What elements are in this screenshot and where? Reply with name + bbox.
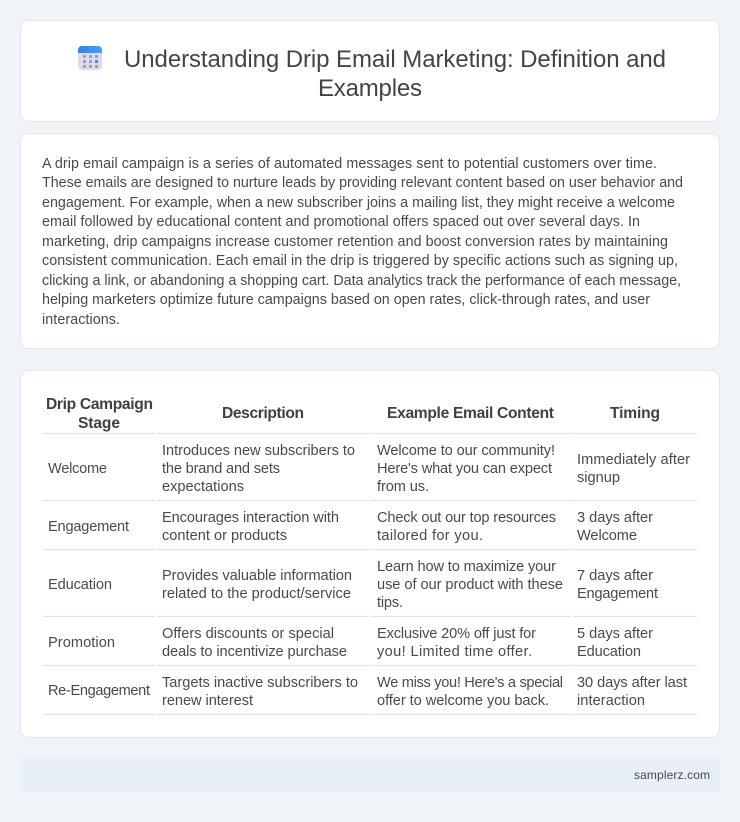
panel: intro paragraph: interactions. <box>42 312 120 328</box>
row: Promotion <box>48 626 653 660</box>
panel: intro paragraph: clicking a link, or abandoning a shopping cart. Data analytics track the performance of each message, <box>42 273 681 289</box>
row: Engagement: 3 days after <box>577 510 653 526</box>
row: Re-Engagement: renew interest <box>162 693 253 709</box>
row: Welcome: Here's what you can expect <box>377 461 552 477</box>
footer: samplerz.com <box>634 768 710 782</box>
row: Welcome: Immediately after <box>577 452 690 468</box>
row: Promotion: Exclusive 20% off just for <box>377 626 536 642</box>
row: Re-Engagement: interaction <box>577 693 645 709</box>
row: Re-Engagement: Re-Engagement <box>48 683 150 699</box>
row: Welcome: Introduces new subscribers to <box>162 443 355 459</box>
row: Promotion: Promotion <box>48 635 115 651</box>
row: Education: Education <box>48 577 112 593</box>
row: Welcome: expectations <box>162 479 244 495</box>
row: Promotion: you! Limited time offer. <box>377 644 532 660</box>
table header: Drip Campaign <box>46 396 153 413</box>
row: Promotion: 5 days after <box>577 626 653 642</box>
icon: calendar <box>78 46 102 70</box>
row: Welcome: the brand and sets <box>162 461 280 477</box>
row: Engagement <box>48 510 653 544</box>
row: Welcome: signup <box>577 470 620 486</box>
panel: intro paragraph: email followed by educational content and promotional offers spaced out over several days. In <box>42 214 640 230</box>
panel: intro paragraph: engagement. For example, when a new subscriber joins a mailing list, they might receive a welcome <box>42 195 675 211</box>
title text: Examples <box>318 75 422 102</box>
panel: intro paragraph <box>20 134 720 348</box>
row: Welcome <box>48 443 690 495</box>
row: Education: 7 days after <box>577 568 653 584</box>
panel: intro paragraph: helping marketers optimize future campaigns based on open rates, click-through rates, and user <box>42 292 650 308</box>
row: Re-Engagement: Targets inactive subscribers to <box>162 675 358 691</box>
row: Engagement: Check out our top resources <box>377 510 556 526</box>
panel: title <box>20 20 720 122</box>
row: Promotion: deals to incentivize purchase <box>162 644 347 660</box>
panel: drip campaign table <box>20 370 720 738</box>
row: Engagement: Welcome <box>577 528 637 544</box>
row: Welcome: Welcome to our community! <box>377 443 555 459</box>
row: Education: Engagement <box>577 586 658 602</box>
row: Re-Engagement <box>48 675 687 709</box>
table header <box>46 396 660 432</box>
row: Education: Provides valuable information <box>162 568 352 584</box>
panel: intro paragraph: consistent communication. Each email in the drip is triggered by specific actions such as signing up, <box>42 253 678 269</box>
table header: Stage <box>78 415 120 432</box>
panel: intro paragraph: marketing, drip campaigns increase customer retention and boost conversion rates by maintaining <box>42 234 668 250</box>
row: Education: Learn how to maximize your <box>377 559 556 575</box>
table header: Timing <box>610 405 660 422</box>
row: Engagement: Encourages interaction with <box>162 510 339 526</box>
row: Welcome: from us. <box>377 479 429 495</box>
title text: Understanding Drip Email Marketing: Definition and <box>124 46 666 73</box>
row: Promotion: Offers discounts or special <box>162 626 334 642</box>
row: Education <box>48 559 658 611</box>
row: Education: tips. <box>377 595 403 611</box>
row: Re-Engagement: offer to welcome you back. <box>377 693 549 709</box>
panel: intro paragraph: A drip email campaign is a series of automated messages sent to potential customers over time. <box>42 156 657 172</box>
row: Engagement: tailored for you. <box>377 528 483 544</box>
row: Education: related to the product/service <box>162 586 351 602</box>
row: Promotion: Education <box>577 644 641 660</box>
row: Welcome: Welcome <box>48 461 107 477</box>
row: Re-Engagement: 30 days after last <box>577 675 687 691</box>
row: Re-Engagement: We miss you! Here's a special <box>377 675 563 691</box>
table header: Example Email Content <box>387 405 554 422</box>
footer <box>20 758 720 792</box>
panel: intro paragraph: These emails are designed to nurture leads by providing relevant content based on user behavior and <box>42 175 683 191</box>
row: Engagement: content or products <box>162 528 287 544</box>
table header: Description <box>222 405 304 422</box>
title text <box>124 46 666 102</box>
row: Education: use of our product with these <box>377 577 563 593</box>
row: Engagement: Engagement <box>48 519 129 535</box>
